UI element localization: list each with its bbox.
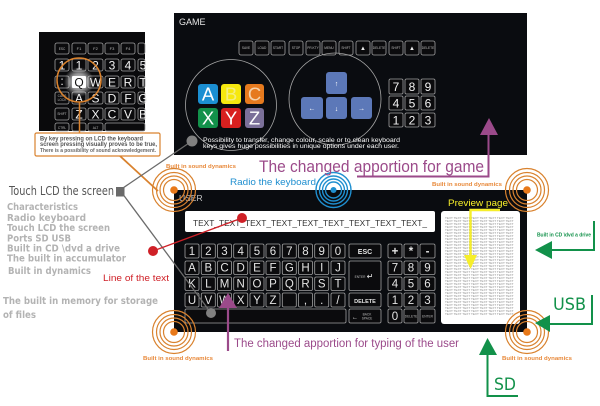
- main letter keys: 7: [286, 246, 293, 258]
- arrow: CD drive: [535, 221, 594, 259]
- radio icon: blue rings: [316, 172, 351, 208]
- preview page label and yellow arrow: Preview page: [448, 198, 508, 208]
- main letter keys: [185, 244, 346, 323]
- preview page: TEXT TEXT TEXT TEXT TEXT TEXT TEXT TEXT: [445, 246, 514, 250]
- connector: touch LCD lines: [120, 141, 211, 313]
- panel: small touch keyboard: Z: [75, 108, 83, 122]
- memory note: [3, 296, 158, 321]
- arrow key cluster: →: [358, 106, 365, 112]
- panel: small touch keyboard: A: [75, 92, 83, 106]
- function key row: SAVE: [242, 46, 250, 50]
- arrow key cluster: ↓: [335, 106, 338, 113]
- game label: GAME: [179, 17, 206, 27]
- control keys: BACK: [363, 312, 372, 316]
- panel: small touch keyboard: T: [139, 76, 147, 90]
- preview page: TEXT TEXT TEXT TEXT TEXT TEXT TEXT TEXT: [445, 225, 514, 229]
- game description text: [203, 137, 400, 150]
- main letter keys: N: [237, 278, 245, 290]
- main letter keys: ,: [304, 295, 307, 307]
- preview page: TEXT TEXT TEXT TEXT TEXT TEXT TEXT TEXT: [445, 303, 514, 307]
- preview page: TEXT TEXT TEXT TEXT TEXT TEXT TEXT TEXT: [445, 222, 514, 226]
- panel: game keyboard: [174, 13, 527, 155]
- sound dynamics: bottom right: [506, 310, 548, 354]
- sound dynamics: top left: [152, 168, 196, 212]
- game description text: keys gives huge possibilities in unique options under each user.: [203, 143, 399, 150]
- ABC XYZ button cluster: X: [202, 108, 214, 128]
- user number pad: 2: [408, 295, 414, 307]
- main letter keys: 5: [254, 246, 260, 258]
- panel: small touch keyboard: B: [139, 108, 147, 122]
- preview page: TEXT TEXT TEXT TEXT TEXT TEXT TEXT TEXT: [445, 240, 514, 244]
- label: built in CD drive: Built in CD \dvd a drive: [537, 232, 591, 238]
- arrow: game apportion: [357, 118, 498, 176]
- control keys: SPACE: [362, 316, 372, 320]
- panel: small touch keyboard: D: [108, 92, 117, 106]
- ABC XYZ button cluster: C: [248, 84, 261, 104]
- main letter keys: H: [301, 262, 310, 274]
- characteristics list: Radio keyboard: [7, 213, 86, 224]
- sound dynamics: bottom left: [152, 310, 196, 354]
- arrow key cluster: ←: [308, 106, 316, 112]
- preview page: TEXT TEXT TEXT TEXT TEXT TEXT TEXT TEXT: [445, 294, 514, 298]
- sound label: top left: Built in sound dynamics: [166, 164, 236, 170]
- panel: small touch keyboard: G: [138, 92, 148, 106]
- callout: key pressing note: [35, 133, 160, 156]
- main letter keys: 3: [221, 246, 228, 258]
- main letter keys: G: [285, 262, 294, 274]
- user number pad: 4: [392, 278, 399, 290]
- panel: small touch keyboard: F2: [93, 46, 99, 51]
- main letter keys: V: [204, 295, 212, 307]
- preview page: TEXT TEXT TEXT TEXT TEXT TEXT TEXT TEXT: [445, 273, 514, 277]
- characteristics list: Built in dynamics: [8, 266, 91, 277]
- preview page: TEXT TEXT TEXT TEXT TEXT TEXT TEXT TEXT: [445, 270, 514, 274]
- function key row: ▲: [360, 46, 366, 52]
- game description text: Possibility to transfer, change colour, scale or to clean keyboard: [203, 137, 400, 144]
- preview page: TEXT TEXT TEXT TEXT TEXT TEXT TEXT TEXT: [445, 276, 514, 280]
- preview page: TEXT TEXT TEXT TEXT TEXT TEXT TEXT TEXT: [445, 237, 514, 241]
- main letter keys: 8: [302, 246, 309, 258]
- function key row: DELETE: [373, 46, 385, 50]
- preview page: TEXT TEXT TEXT TEXT TEXT TEXT TEXT TEXT: [445, 309, 514, 313]
- panel: small touch keyboard: :: [60, 74, 64, 88]
- main letter keys: D: [237, 262, 245, 274]
- main letter keys: K: [188, 278, 196, 290]
- arrow: SD: [479, 338, 518, 396]
- preview page: TEXT TEXT TEXT TEXT TEXT TEXT TEXT TEXT: [445, 231, 514, 235]
- marker: touch LCD square: [116, 187, 124, 196]
- control keys: DELETE: [354, 299, 376, 305]
- function key row: SHIFT: [391, 46, 401, 50]
- text input line: [185, 211, 435, 232]
- characteristics list: Ports SD USB: [7, 234, 71, 244]
- preview page: TEXT TEXT TEXT TEXT TEXT TEXT TEXT TEXT: [445, 243, 514, 247]
- function key row: LOAD: [258, 46, 267, 50]
- panel: small touch keyboard: SHIFT: [57, 112, 67, 116]
- game number pad: 6: [425, 96, 432, 110]
- main letter keys: 6: [270, 246, 276, 258]
- characteristics list: [7, 202, 126, 277]
- label: SD: SD: [494, 375, 516, 395]
- ABC XYZ button cluster: A: [202, 84, 215, 104]
- game number pad: 4: [393, 96, 400, 110]
- memory note: of files: [3, 310, 36, 321]
- user number pad: 6: [424, 278, 431, 290]
- user number pad: 8: [408, 262, 414, 274]
- callout: key pressing note: By key pressing on LCD the keyboard: [40, 136, 143, 142]
- preview page: TEXT TEXT TEXT TEXT TEXT TEXT TEXT TEXT: [445, 297, 514, 301]
- arrow: typing apportion: [219, 293, 237, 351]
- preview page: TEXT TEXT TEXT TEXT TEXT TEXT TEXT TEXT: [445, 249, 514, 253]
- main letter keys: 2: [205, 246, 212, 258]
- user number pad: 0: [392, 311, 398, 323]
- main letter keys: M: [220, 278, 229, 290]
- panel: small touch keyboard: R: [124, 76, 133, 90]
- main letter keys: 4: [237, 246, 244, 258]
- game number pad: 8: [409, 80, 416, 94]
- main letter keys: 9: [318, 246, 325, 258]
- control keys: ↵: [367, 272, 373, 281]
- panel: small touch keyboard: CTRL: [58, 126, 66, 130]
- sound label: bottom left: Built in sound dynamics: [143, 356, 213, 362]
- main letter keys: Y: [253, 295, 261, 307]
- panel: small touch keyboard: 1: [59, 58, 66, 72]
- ABC XYZ button cluster: Y: [225, 108, 237, 128]
- panel: small touch keyboard: F1: [77, 46, 82, 51]
- preview page: [441, 211, 520, 324]
- sound label: bottom right: Built in sound dynamics: [502, 356, 572, 362]
- main letter keys: R: [301, 278, 310, 290]
- panel: user keyboard: [174, 190, 527, 332]
- main letter keys: J: [335, 262, 341, 274]
- callout: key pressing note: There is a possibility of sound acknowledgement.: [40, 148, 157, 154]
- heading: changed apportion for typing: The changed apportion for typing of the user: [234, 338, 459, 350]
- function key row: STOP: [292, 46, 300, 50]
- label: radio the keyboard: Radio the keyboard: [230, 177, 316, 188]
- ABC XYZ button cluster: Z: [249, 108, 260, 128]
- user number pad: 7: [392, 262, 398, 274]
- arrow key cluster: [289, 53, 381, 145]
- heading: changed apportion for game: The changed apportion for game: [259, 157, 484, 176]
- control keys: ←: [352, 315, 358, 321]
- arrow key cluster: ↑: [335, 81, 338, 88]
- main letter keys: 1: [189, 246, 195, 258]
- main letter keys: 0: [335, 246, 341, 258]
- main letter keys: Q: [285, 278, 294, 290]
- panel: small touch keyboard: W: [90, 76, 102, 90]
- characteristics list: Touch LCD the screen: [7, 223, 110, 234]
- main letter keys: S: [318, 278, 326, 290]
- main letter keys: A: [188, 262, 196, 274]
- main letter keys: E: [253, 262, 261, 274]
- panel: small touch keyboard: 5: [140, 58, 147, 72]
- panel: small touch keyboard: F3: [110, 46, 115, 51]
- panel: small touch keyboard: ESC: [59, 47, 66, 51]
- sound dynamics: top right: [506, 168, 548, 212]
- preview page: TEXT TEXT TEXT TEXT TEXT TEXT TEXT TEXT: [445, 255, 514, 259]
- panel: small touch keyboard: V: [124, 108, 132, 122]
- panel: small touch keyboard: 2: [92, 58, 99, 72]
- preview page: TEXT TEXT TEXT TEXT TEXT TEXT TEXT TEXT: [445, 261, 514, 265]
- function key row: ▲: [409, 46, 415, 52]
- preview page: TEXT TEXT TEXT TEXT TEXT TEXT TEXT TEXT: [445, 291, 514, 295]
- main letter keys: /: [336, 295, 340, 307]
- user number pad: 5: [408, 278, 414, 290]
- function key row: MENU: [324, 46, 334, 50]
- game number pad: 1: [393, 114, 400, 128]
- panel: small touch keyboard: F: [124, 92, 132, 106]
- preview page: TEXT TEXT TEXT TEXT TEXT TEXT TEXT TEXT: [445, 219, 514, 223]
- control keys: ESC: [358, 249, 372, 256]
- function key row: START: [273, 46, 283, 50]
- user number pad: 9: [424, 262, 431, 274]
- main letter keys: .: [320, 295, 323, 307]
- user number pad: *: [409, 246, 414, 258]
- ABC XYZ button cluster: [186, 60, 276, 150]
- callout: key pressing note: screen pressing visually proves to be true,: [40, 141, 157, 148]
- preview page: TEXT TEXT TEXT TEXT TEXT TEXT TEXT TEXT: [445, 285, 514, 289]
- user number pad: +: [392, 246, 399, 258]
- game number pad: 2: [409, 114, 416, 128]
- preview page: TEXT TEXT TEXT TEXT TEXT TEXT TEXT TEXT: [445, 279, 514, 283]
- user number pad: [388, 244, 435, 323]
- main letter keys: F: [269, 262, 277, 274]
- control keys: ENTER: [355, 275, 366, 279]
- preview page: TEXT TEXT TEXT TEXT TEXT TEXT TEXT TEXT: [445, 258, 514, 262]
- panel: small touch keyboard: F4: [126, 46, 131, 51]
- preview page: TEXT TEXT TEXT TEXT TEXT TEXT TEXT TEXT: [445, 267, 514, 271]
- main letter keys: T: [334, 278, 342, 290]
- ABC XYZ button cluster: B: [225, 84, 237, 104]
- panel: small touch keyboard: S: [91, 92, 100, 106]
- main letter keys: B: [204, 262, 212, 274]
- game number pad: 3: [425, 114, 432, 128]
- main letter keys: O: [253, 278, 262, 290]
- user label: USER: [179, 193, 203, 203]
- user number pad: ENTER: [422, 314, 434, 318]
- magnifier circle and pointer: [57, 58, 158, 191]
- preview page: TEXT TEXT TEXT TEXT TEXT TEXT TEXT TEXT: [445, 234, 514, 238]
- memory note: The built in memory for storage: [3, 296, 158, 307]
- preview page: TEXT TEXT TEXT TEXT TEXT TEXT TEXT TEXT: [445, 264, 514, 268]
- label: touch LCD the screen: Touch LCD the screen: [8, 184, 114, 198]
- characteristics list: Characteristics: [7, 202, 78, 213]
- main letter keys: L: [205, 278, 212, 290]
- main letter keys: U: [188, 295, 196, 307]
- sound label: top right: Built in sound dynamics: [432, 182, 502, 188]
- preview page: TEXT TEXT TEXT TEXT TEXT TEXT TEXT TEXT: [445, 306, 514, 310]
- panel: small touch keyboard: Q: [74, 76, 84, 90]
- preview page: TEXT TEXT TEXT TEXT TEXT TEXT TEXT TEXT: [445, 216, 514, 220]
- preview page: TEXT TEXT TEXT TEXT TEXT TEXT TEXT TEXT: [445, 288, 514, 292]
- main letter keys: X: [237, 295, 245, 307]
- user number pad: -: [426, 246, 430, 258]
- game number pad: 9: [425, 80, 432, 94]
- preview page: TEXT TEXT TEXT TEXT TEXT TEXT TEXT TEXT: [445, 228, 514, 232]
- main letter keys: W: [219, 295, 230, 307]
- connector: line of the text: [148, 213, 247, 256]
- preview page: TEXT TEXT TEXT TEXT TEXT TEXT TEXT TEXT: [445, 312, 514, 316]
- preview page: TEXT TEXT TEXT TEXT TEXT TEXT TEXT TEXT: [445, 252, 514, 256]
- panel: small touch keyboard: C: [108, 108, 117, 122]
- function key row: SHIFT: [341, 46, 351, 50]
- user number pad: DELETE: [405, 314, 417, 318]
- preview page label and yellow arrow: [448, 198, 508, 269]
- function key row: DELETE: [422, 46, 434, 50]
- panel: small touch keyboard: 1: [76, 58, 83, 72]
- panel: small touch keyboard: ALT: [93, 126, 98, 130]
- user number pad: 1: [392, 295, 398, 307]
- preview page: TEXT TEXT TEXT TEXT TEXT TEXT TEXT TEXT: [445, 282, 514, 286]
- characteristics list: Built in CD \dvd a drive: [7, 244, 120, 254]
- text input line: TEXT_TEXT_TEXT_TEXT_TEXT_TEXT_TEXT_TEXT_TEXT_: [193, 218, 427, 228]
- main letter keys: C: [220, 262, 229, 274]
- touch point: game panel: [186, 136, 198, 146]
- label: line of the text: Line of the text: [103, 273, 170, 283]
- panel: small touch keyboard: 4: [125, 58, 132, 72]
- control keys: [349, 244, 381, 323]
- main letter keys: P: [269, 278, 277, 290]
- panel: small touch keyboard: CAPS: [58, 94, 66, 98]
- game number pad: 5: [409, 96, 416, 110]
- game number pad: [389, 79, 435, 128]
- label: USB: USB: [553, 295, 586, 315]
- main letter keys: I: [320, 262, 323, 274]
- arrow: USB: [535, 295, 592, 332]
- panel: small touch keyboard: LOCK: [58, 98, 67, 102]
- panel: small touch keyboard: X: [91, 108, 100, 122]
- panel: small touch keyboard: 3: [109, 58, 116, 72]
- panel: small touch keyboard: [39, 32, 148, 131]
- game number pad: 7: [393, 80, 400, 94]
- function key row: PR.KTY: [307, 46, 320, 50]
- function key row: [239, 41, 435, 55]
- user number pad: 3: [424, 295, 431, 307]
- touch point: user panel: [206, 308, 216, 318]
- main letter keys: Z: [269, 295, 277, 307]
- characteristics list: The built in accumulator: [7, 254, 126, 264]
- panel: small touch keyboard: E: [108, 76, 116, 90]
- preview page: TEXT TEXT TEXT TEXT TEXT TEXT TEXT TEXT: [445, 300, 514, 304]
